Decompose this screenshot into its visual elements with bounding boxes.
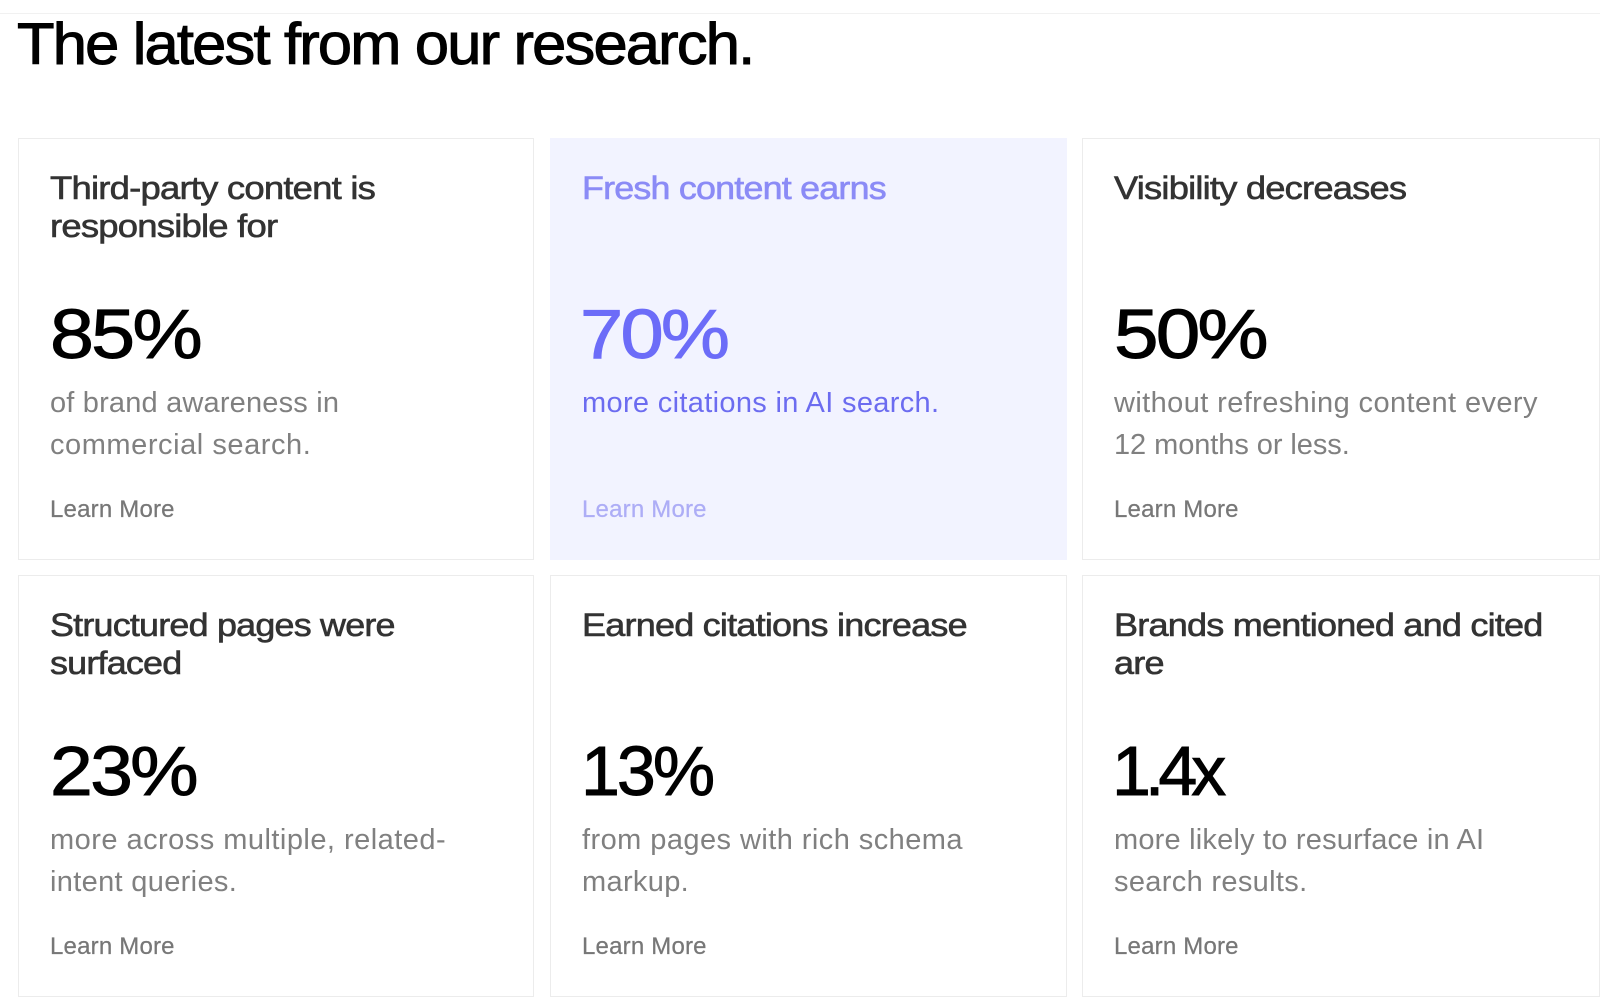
card description xyxy=(1114,387,1538,460)
card description: more citations in AI search. xyxy=(582,387,939,419)
card heading: Earned citations increase xyxy=(582,607,967,643)
statistic: 23%: 23% xyxy=(50,732,196,810)
card description: more likely to resurface in AI xyxy=(1114,824,1484,856)
card heading: Brands mentioned and cited xyxy=(1114,607,1543,643)
card description xyxy=(582,824,963,898)
link: learn more: Learn More xyxy=(50,496,175,523)
panel: fresh content (highlighted) xyxy=(550,138,1067,560)
card heading: surfaced xyxy=(50,645,181,681)
panel: earned citations xyxy=(550,575,1067,997)
card heading: Structured pages were xyxy=(50,607,395,643)
link: learn more: Learn More xyxy=(582,933,707,960)
card heading xyxy=(1114,607,1543,681)
card description: from pages with rich schema xyxy=(582,824,963,856)
card description xyxy=(50,824,446,898)
card heading xyxy=(50,170,375,244)
statistic: 50%: 50% xyxy=(1114,295,1266,373)
card heading: responsible for xyxy=(50,208,277,244)
statistic: 1.4x: 1.4x xyxy=(1112,732,1220,810)
card heading xyxy=(50,607,395,681)
card description: of brand awareness in xyxy=(50,387,339,419)
title: The latest from our research. xyxy=(17,12,753,77)
card heading: Fresh content earns xyxy=(582,170,886,206)
link: learn more: Learn More xyxy=(1114,496,1239,523)
card description: intent queries. xyxy=(50,866,237,898)
card description: without refreshing content every xyxy=(1114,387,1538,419)
panel: visibility decreases xyxy=(1082,138,1600,560)
link: learn more: Learn More xyxy=(50,933,175,960)
statistic: 13%: 13% xyxy=(581,732,712,810)
card description: more across multiple, related- xyxy=(50,824,446,856)
card description xyxy=(50,387,339,460)
statistic: 85%: 85% xyxy=(50,295,200,373)
card description: commercial search. xyxy=(50,428,311,460)
panel: brands mentioned and cited xyxy=(1082,575,1600,997)
card description: search results. xyxy=(1114,866,1308,898)
panel: structured pages xyxy=(18,575,534,997)
panel: third-party content xyxy=(18,138,534,560)
link: learn more: Learn More xyxy=(1114,933,1239,960)
card heading: Third-party content is xyxy=(50,170,375,206)
card description: markup. xyxy=(582,866,689,898)
card description xyxy=(1114,824,1484,898)
link: learn more: Learn More xyxy=(582,496,707,523)
statistic: 70%: 70% xyxy=(580,295,727,373)
card heading: Visibility decreases xyxy=(1114,170,1406,206)
card description: 12 months or less. xyxy=(1114,428,1350,460)
card heading: are xyxy=(1114,645,1164,681)
